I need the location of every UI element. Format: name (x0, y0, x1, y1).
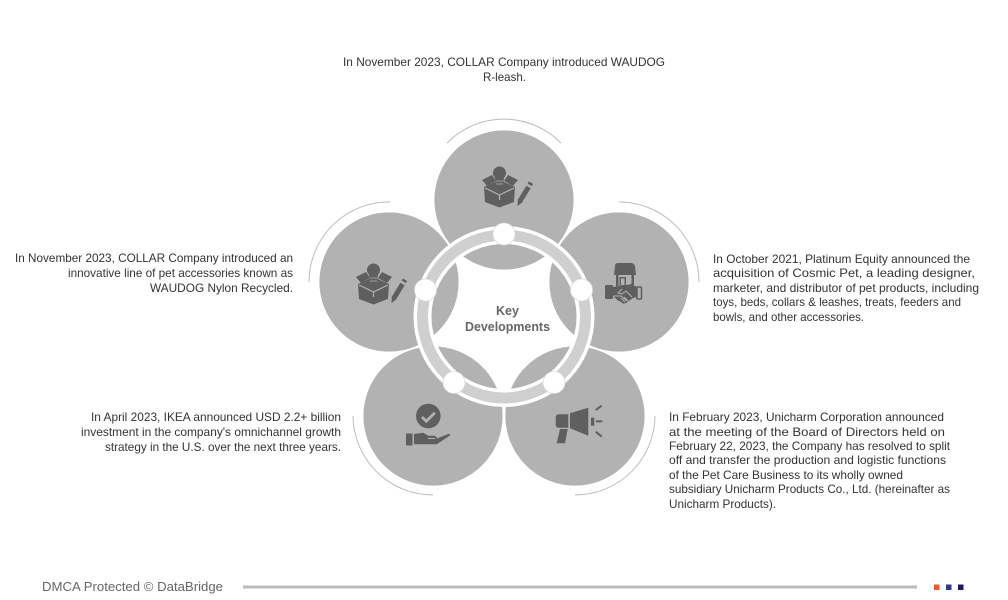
circle: top (434, 130, 574, 270)
center label (465, 303, 550, 334)
text: right development: bowls, and other accessories. (713, 310, 864, 324)
text: bottom-right development: February 22, 2023, the Company has resolved to split (669, 439, 951, 453)
text: right development (713, 252, 979, 324)
footer squares (934, 584, 964, 590)
text: bottom-right development: In February 2023, Unicharm Corporation announced (669, 410, 944, 424)
text: top development (343, 55, 665, 84)
circle: bottom-left (363, 346, 503, 486)
text: top development: In November 2023, COLLAR Company introduced WAUDOG (343, 55, 665, 69)
ring nodes (414, 223, 592, 394)
circle: right (549, 212, 689, 352)
circle: bottom-right (505, 346, 645, 486)
text: left development: WAUDOG Nylon Recycled. (150, 281, 293, 295)
icon: box with bulb and pencil (top) (482, 166, 533, 208)
footer credit: DMCA Protected © DataBridge (42, 579, 223, 594)
text: right development: acquisition of Cosmic Pet, a leading designer, (713, 266, 975, 280)
text: bottom-right development: of the Pet Care Business to its wholly owned (669, 468, 903, 482)
icon: store and handshake (605, 263, 642, 304)
icon: box with bulb and pencil (left) (356, 264, 407, 304)
footer bar (243, 586, 917, 588)
center label: Developments (465, 319, 550, 334)
text: bottom-right development: subsidiary Unicharm Products Co., Ltd. (hereinafter as (669, 482, 950, 496)
text: bottom-right development: off and transfer the production and logistic functions (669, 453, 946, 467)
text: bottom-left development: In April 2023, IKEA announced USD 2.2+ billion (91, 410, 341, 424)
center label: Key (496, 303, 520, 318)
icon: megaphone (556, 405, 602, 443)
text: right development: In October 2021, Platinum Equity announced the (713, 252, 970, 266)
central ring (422, 235, 586, 398)
text: left development: In November 2023, COLLAR Company introduced an (15, 251, 293, 265)
text: right development: toys, beds, collars & leashes, treats, feeders and (713, 295, 961, 309)
text: bottom-right development (669, 410, 951, 511)
text: left development (15, 251, 293, 295)
text: bottom-left development: investment in the company's omnichannel growth (81, 425, 341, 439)
text: top development: R-leash. (483, 70, 526, 84)
icon: hand with check badge (406, 404, 450, 446)
text: bottom-right development: Unicharm Products). (669, 497, 776, 511)
text: bottom-right development: at the meeting of the Board of Directors held on (669, 425, 945, 439)
text: left development: innovative line of pet accessories known as (68, 266, 293, 280)
text: bottom-left development (81, 410, 341, 454)
text: right development: marketer, and distributor of pet products, including (713, 281, 979, 295)
text: bottom-left development: strategy in the U.S. over the next three years. (105, 440, 341, 454)
circle: left (319, 212, 459, 352)
arcs around circles (309, 119, 699, 495)
